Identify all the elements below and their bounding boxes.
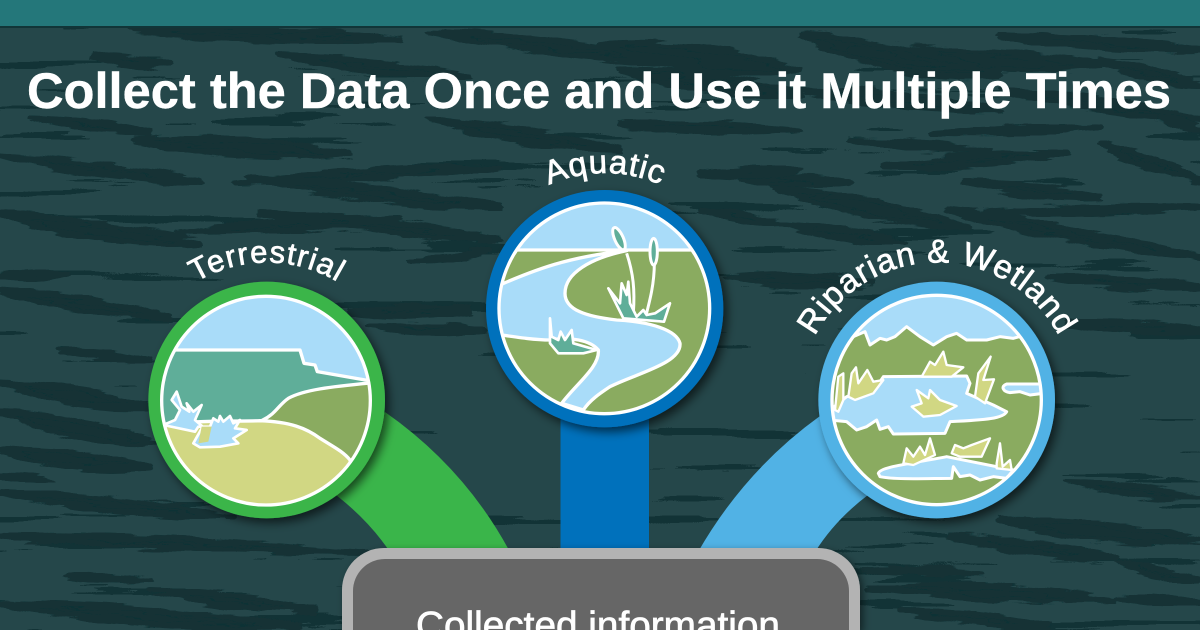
panel: aquatic badge: [486, 190, 723, 427]
connector: terrestrial: [325, 412, 510, 552]
panel: terrestrial badge: [148, 282, 385, 530]
panel: collected information: [342, 548, 860, 630]
connector: riparian and wetland: [698, 416, 868, 552]
title: Collect the Data Once and Use it Multiple Times: [27, 63, 1171, 119]
label: Riparian & Wetland: Riparian & Wetland: [796, 239, 1079, 334]
panel: riparian and wetland badge: [818, 280, 1055, 518]
top banner: [0, 0, 1200, 28]
connector: aquatic: [560, 410, 649, 552]
label: Aquatic: Aquatic: [548, 154, 664, 186]
label: Terrestrial: Terrestrial: [186, 244, 347, 282]
